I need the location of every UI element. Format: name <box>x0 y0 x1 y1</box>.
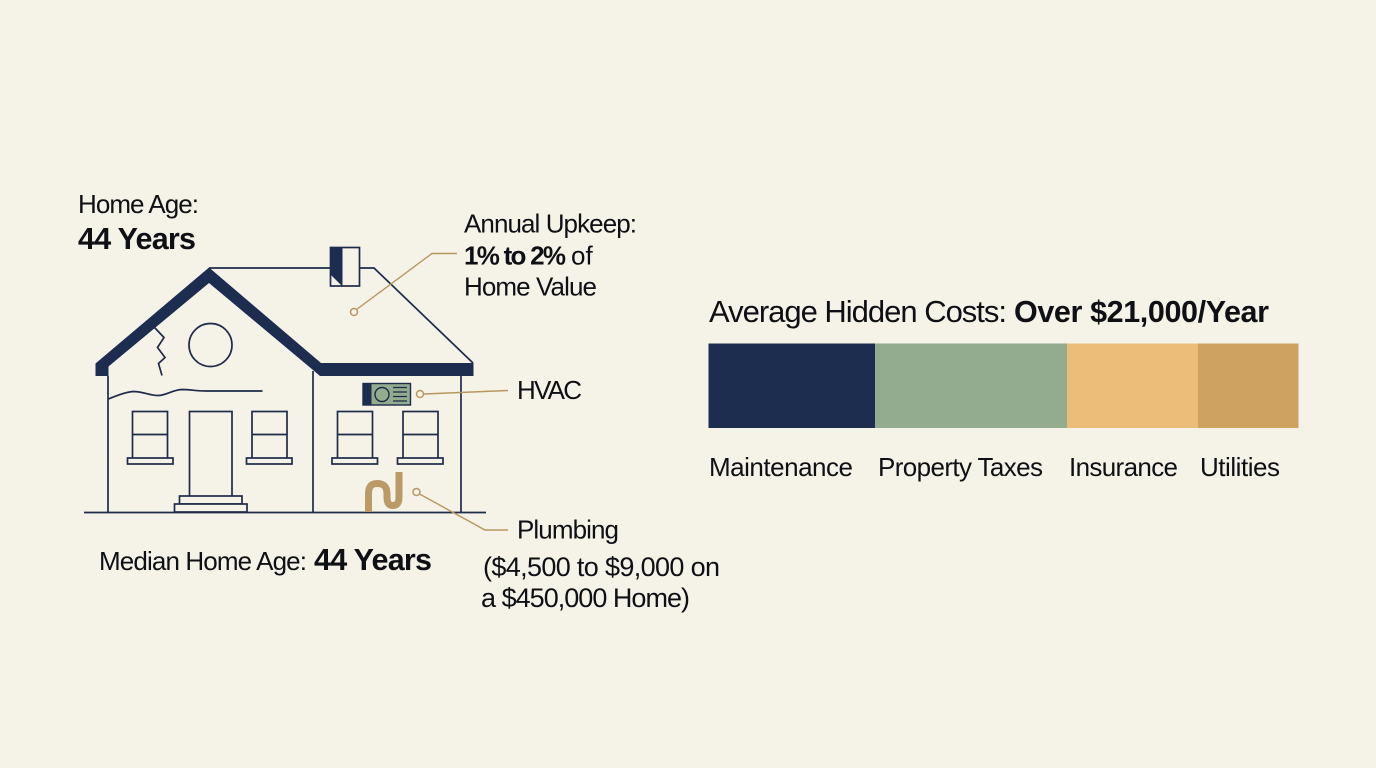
callout: annual upkeep: of <box>571 240 593 270</box>
callout: plumbing: ($4,500 to $9,000 on <box>483 552 720 582</box>
caption: median home age <box>99 543 432 577</box>
legend: bar labels <box>709 452 1280 482</box>
heading: average hidden costs: Average Hidden Costs: <box>709 294 1007 329</box>
callout: annual upkeep: Home Value <box>464 272 597 302</box>
legend: bar labels: Maintenance <box>709 452 853 482</box>
segment: utilities <box>1198 344 1298 428</box>
left window 1 <box>128 412 173 464</box>
segment: property taxes <box>875 344 1067 428</box>
legend: bar labels: Insurance <box>1069 452 1178 482</box>
upper roof outline <box>209 268 473 363</box>
caption: median home age: Median Home Age: <box>99 546 307 576</box>
illustration: house <box>84 247 486 512</box>
wall crack vertical <box>154 328 165 376</box>
legend: bar labels: Property Taxes <box>878 452 1043 482</box>
ground line <box>84 512 486 514</box>
heading: average hidden costs: Over $21,000/Year <box>1014 295 1269 329</box>
right window 2 <box>398 412 443 464</box>
segment: insurance <box>1067 344 1198 428</box>
icon: HVAC unit <box>363 384 410 405</box>
chimney <box>330 247 360 286</box>
roof <box>96 268 474 376</box>
segment: maintenance <box>708 344 875 428</box>
callout: HVAC <box>416 375 582 405</box>
caption: median home age: 44 Years <box>314 543 432 577</box>
left window 2 <box>246 412 292 464</box>
legend: bar labels: Utilities <box>1200 452 1280 482</box>
text: home age: 44 Years <box>78 222 196 256</box>
gable window <box>189 324 232 366</box>
text: home age <box>78 189 199 256</box>
callout: annual upkeep <box>350 208 637 316</box>
house walls <box>108 371 461 512</box>
wall crack horizontal <box>108 390 262 399</box>
heading: average hidden costs <box>709 294 1269 329</box>
chart: stacked cost bar <box>708 344 1298 428</box>
text: home age: Home Age: <box>78 189 199 219</box>
callout: plumbing: Plumbing <box>517 514 619 544</box>
callout: plumbing <box>413 488 720 613</box>
icon: plumbing pipe <box>368 472 399 512</box>
door <box>174 412 247 512</box>
right window 1 <box>332 412 378 464</box>
callout: annual upkeep: 1% to 2% <box>464 240 566 270</box>
callout: annual upkeep: Annual Upkeep: <box>464 208 637 238</box>
callout: HVAC: HVAC <box>517 375 582 405</box>
callout: plumbing: a $450,000 Home) <box>481 583 690 613</box>
